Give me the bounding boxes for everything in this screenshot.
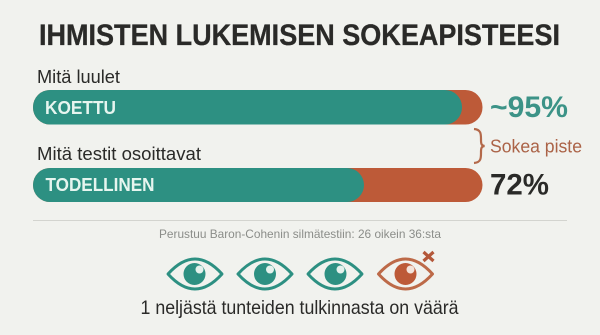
icon: eye 1 — [168, 259, 222, 289]
bar: perceived: KOETTU — [45, 98, 116, 118]
bar: actual: TODELLINEN — [46, 175, 154, 195]
label: what tests show: Mitä testit osoittavat — [37, 143, 201, 164]
bar: perceived — [33, 90, 482, 124]
icon: wrong eye — [378, 252, 434, 289]
label: what you think: Mitä luulet — [37, 66, 120, 87]
value: perceived percentage: ~95% — [490, 91, 568, 124]
value: actual percentage: 72% — [490, 168, 549, 202]
brace: blind spot — [474, 129, 484, 163]
bar: actual — [33, 168, 482, 202]
label: blind spot: Sokea piste — [490, 136, 582, 156]
caption: 1 neljästä tunteiden tulkinnasta on väärä — [140, 297, 459, 319]
icon: eye 2 — [238, 259, 292, 289]
divider — [33, 220, 567, 221]
icon: eye 3 — [308, 259, 362, 289]
source note: Perustuu Baron-Cohenin silmätestiin: 26 oikein 36:sta — [159, 227, 441, 241]
title: IHMISTEN LUKEMISEN SOKEAPISTEESI — [39, 19, 560, 52]
